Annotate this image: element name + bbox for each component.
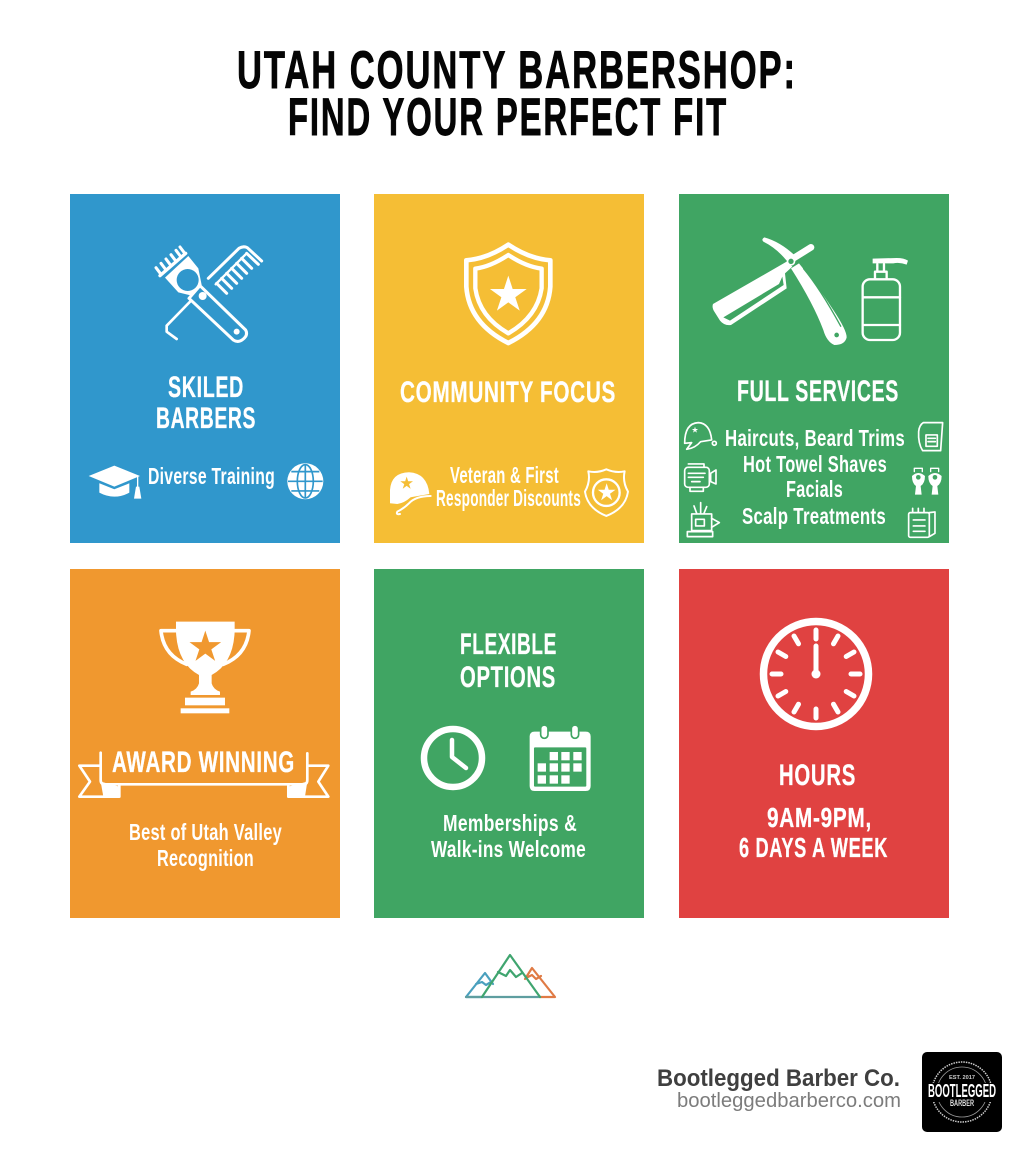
logo: bootlegged barber: EST. 2017	[949, 1075, 975, 1081]
text: memberships: Walk-ins Welcome	[431, 836, 586, 862]
icon: small steamer	[685, 464, 716, 491]
ribbon banner	[79, 753, 328, 797]
footer brand text: Bootlegged Barber Co.	[657, 1065, 900, 1092]
heading: FLEXIBLE	[460, 628, 557, 661]
text: opening hours: 6 DAYS A WEEK	[739, 832, 888, 863]
text: service list	[725, 425, 905, 529]
heading	[156, 371, 256, 435]
panel: hours	[679, 569, 949, 918]
icon: trophy	[161, 622, 249, 713]
logo: bootlegged barber: BARBER	[950, 1098, 974, 1108]
heading: FULL SERVICES	[737, 375, 899, 408]
text: recognition: Recognition	[157, 845, 254, 871]
icon: calendar	[530, 725, 591, 791]
panel: skilled barbers	[70, 194, 340, 543]
icon: wall clock	[764, 622, 868, 726]
icon: police badge	[585, 469, 628, 516]
heading	[460, 628, 557, 694]
text: service list: Hot Towel Shaves	[743, 451, 887, 477]
text: service list: Facials	[786, 476, 843, 502]
icon: shield with star	[466, 245, 550, 343]
panel: flexible options	[374, 569, 644, 918]
text: diverse training: Diverse Training	[148, 463, 275, 489]
text: service list: Scalp Treatments	[742, 503, 886, 529]
text: opening hours	[739, 802, 888, 863]
panel: full services	[679, 194, 949, 543]
icon: small jar	[919, 423, 943, 451]
heading: OPTIONS	[460, 661, 556, 694]
footer brand text	[657, 1065, 901, 1112]
heading: HOURS	[779, 759, 856, 792]
text: discounts: Responder Discounts	[436, 485, 581, 511]
icon: clock	[424, 729, 482, 787]
heading: AWARD WINNING	[112, 746, 295, 779]
icon: mountains	[466, 955, 555, 997]
icon: small plant pot	[687, 503, 719, 537]
text: discounts	[436, 462, 581, 511]
footer brand text: bootleggedbarberco.com	[677, 1090, 901, 1112]
icon: crossed clipper and comb	[156, 247, 262, 341]
icon: straight razor	[713, 237, 847, 345]
text: memberships	[431, 810, 586, 862]
icon: small helmet	[685, 423, 716, 449]
heading: COMMUNITY FOCUS	[400, 376, 616, 409]
icon: graduation cap	[89, 466, 141, 499]
text: discounts: Veteran & First	[450, 462, 559, 488]
title	[237, 41, 797, 147]
heading: SKILED	[168, 371, 244, 404]
panel: award winning	[70, 569, 340, 918]
icon: small towels	[912, 468, 942, 495]
text: recognition	[129, 819, 282, 871]
icon: helmet	[390, 472, 431, 514]
text: recognition: Best of Utah Valley	[129, 819, 282, 845]
panel: community focus	[374, 194, 644, 543]
logo: bootlegged barber	[922, 1052, 1002, 1132]
title: FIND YOUR PERFECT FIT	[288, 88, 728, 147]
text: memberships: Memberships &	[443, 810, 577, 836]
heading: BARBERS	[156, 402, 256, 435]
text: opening hours: 9AM-9PM,	[767, 802, 872, 833]
icon: small notepad	[909, 508, 935, 537]
icon: globe	[287, 463, 323, 499]
icon: pump bottle	[863, 258, 908, 340]
text: service list: Haircuts, Beard Trims	[725, 425, 905, 451]
